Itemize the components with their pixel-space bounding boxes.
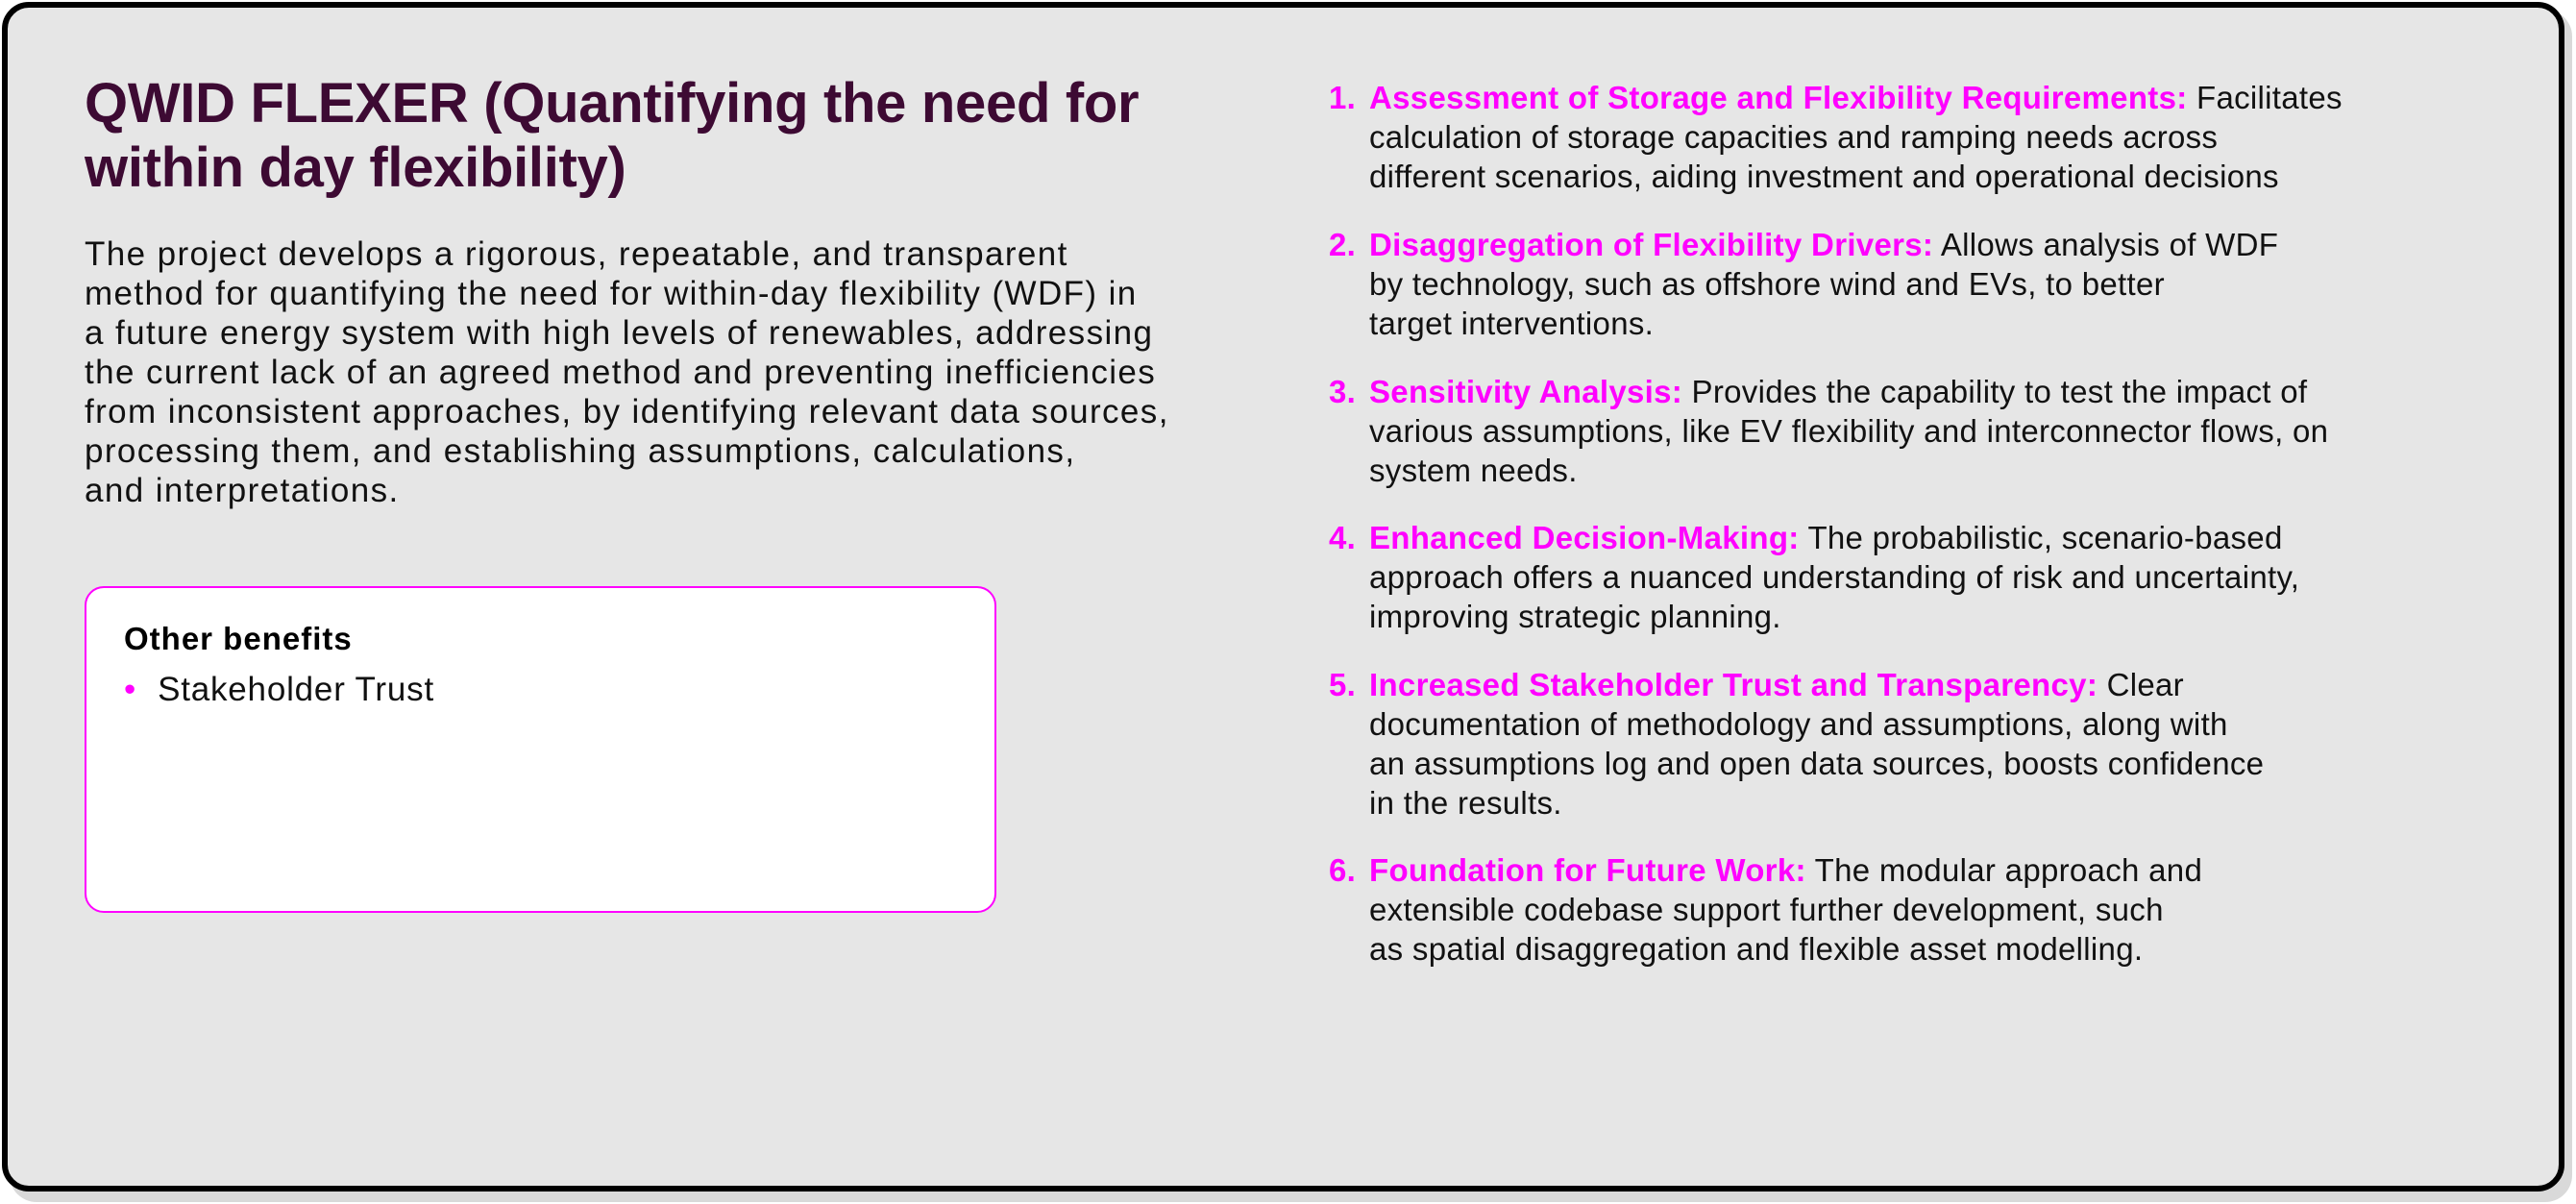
list item 4: approach offers a nuanced understanding of risk and uncertainty, bbox=[1369, 559, 2299, 595]
list item 5: Increased Stakeholder Trust and Transparency: Clear bbox=[1369, 667, 2184, 702]
text block: project description: from inconsistent approaches, by identifying relevant data sources, bbox=[85, 393, 1169, 430]
list item 4: improving strategic planning. bbox=[1369, 599, 1781, 634]
list item 2 bbox=[1329, 227, 2278, 341]
heading: other benefits: Other benefits bbox=[124, 621, 353, 656]
list item 3 bbox=[1329, 374, 2328, 488]
list item 2: target interventions. bbox=[1369, 306, 1654, 341]
list item 2: 2. bbox=[1329, 227, 1356, 262]
list item 1: calculation of storage capacities and ramping needs across bbox=[1369, 119, 2218, 155]
list item 5: an assumptions log and open data sources, boosts confidence bbox=[1369, 746, 2264, 781]
panel: other benefits bbox=[85, 586, 996, 913]
list item 4 bbox=[1329, 520, 2299, 634]
list item 6: as spatial disaggregation and flexible asset modelling. bbox=[1369, 931, 2143, 967]
list item 5 bbox=[1329, 667, 2264, 821]
list item 6: Foundation for Future Work: The modular approach and bbox=[1369, 852, 2202, 888]
list item 1 bbox=[1329, 80, 2343, 194]
text block: project description: the current lack of an agreed method and preventing inefficiencies bbox=[85, 354, 1156, 391]
title: QWID FLEXER (Quantifying the need for bbox=[85, 72, 1139, 135]
list item 3: various assumptions, like EV flexibility and interconnector flows, on bbox=[1369, 413, 2328, 449]
list item 4: 4. bbox=[1329, 520, 1356, 555]
list item 6 bbox=[1329, 852, 2202, 967]
list item 2: by technology, such as offshore wind and EVs, to better bbox=[1369, 266, 2165, 302]
list item 6: extensible codebase support further development, such bbox=[1369, 892, 2164, 927]
text block: project description: and interpretations. bbox=[85, 472, 400, 509]
list item 5: documentation of methodology and assumptions, along with bbox=[1369, 706, 2228, 742]
text block: project description bbox=[85, 235, 1169, 509]
text block: project description: processing them, and establishing assumptions, calculations, bbox=[85, 432, 1075, 470]
list item 2: Disaggregation of Flexibility Drivers: Allows analysis of WDF bbox=[1369, 227, 2278, 262]
list item 3: system needs. bbox=[1369, 453, 1578, 488]
title bbox=[85, 72, 1139, 199]
list item 1: Assessment of Storage and Flexibility Requirements: Facilitates bbox=[1369, 80, 2343, 115]
bullet: stakeholder trust: • Stakeholder Trust bbox=[124, 671, 434, 708]
text block: project description: method for quantifying the need for within-day flexibility (WDF) in bbox=[85, 275, 1138, 312]
title: within day flexibility) bbox=[85, 136, 626, 199]
list item 5: in the results. bbox=[1369, 785, 1562, 821]
list item 1: different scenarios, aiding investment and operational decisions bbox=[1369, 159, 2279, 194]
list item 5: 5. bbox=[1329, 667, 1356, 702]
list item 1: 1. bbox=[1329, 80, 1356, 115]
list item 3: 3. bbox=[1329, 374, 1356, 409]
list item 6: 6. bbox=[1329, 852, 1356, 888]
text block: project description: The project develops a rigorous, repeatable, and transparent bbox=[85, 235, 1068, 273]
list item 3: Sensitivity Analysis: Provides the capability to test the impact of bbox=[1369, 374, 2307, 409]
text block: project description: a future energy system with high levels of renewables, addressing bbox=[85, 314, 1153, 352]
list item 4: Enhanced Decision-Making: The probabilistic, scenario-based bbox=[1369, 520, 2283, 555]
